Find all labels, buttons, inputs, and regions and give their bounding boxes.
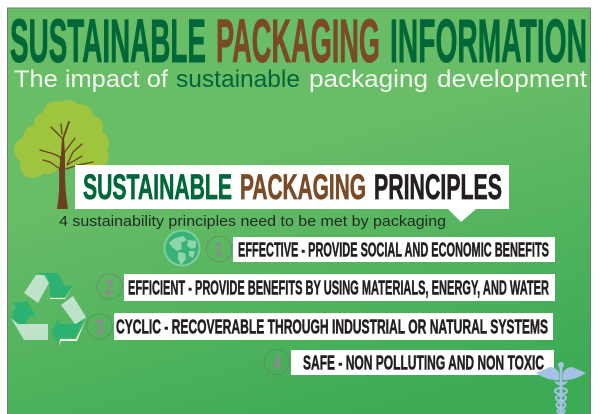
icon: globe — [164, 230, 200, 266]
heading text: SUSTAINABLE — [83, 168, 232, 207]
panel: heading box — [75, 165, 509, 222]
number badge 1: 1 — [215, 238, 223, 262]
heading text — [83, 168, 502, 207]
number badge 1 — [206, 236, 232, 262]
principle 2 — [97, 274, 555, 301]
principle 4 — [264, 349, 554, 375]
heading text: PACKAGING — [240, 168, 366, 207]
subtitle: packaging — [309, 66, 428, 93]
number badge 4: 4 — [272, 352, 282, 374]
subheading: 4 sustainability principles need to be met by packaging — [59, 213, 446, 230]
number badge 4 — [264, 349, 290, 375]
subtitle: development — [437, 66, 587, 93]
number badge 2 — [97, 274, 122, 299]
subtitle — [14, 66, 587, 93]
number badge 3 — [87, 314, 112, 339]
icon: recycling arrows — [11, 273, 86, 346]
title: PACKAGING — [216, 7, 380, 75]
tree crown — [14, 100, 109, 178]
title: SUSTAINABLE — [10, 7, 206, 75]
icon: caduceus — [536, 362, 586, 414]
number badge 3: 3 — [95, 316, 104, 339]
icon: tree — [14, 100, 109, 209]
principle 3 — [87, 313, 553, 340]
heading text: PRINCIPLES — [374, 168, 502, 207]
principle 1 — [206, 236, 555, 262]
subtitle: sustainable — [176, 66, 300, 93]
subtitle: The impact of — [14, 66, 168, 93]
number badge 2: 2 — [105, 276, 114, 299]
tree trunk and branches — [57, 138, 68, 209]
